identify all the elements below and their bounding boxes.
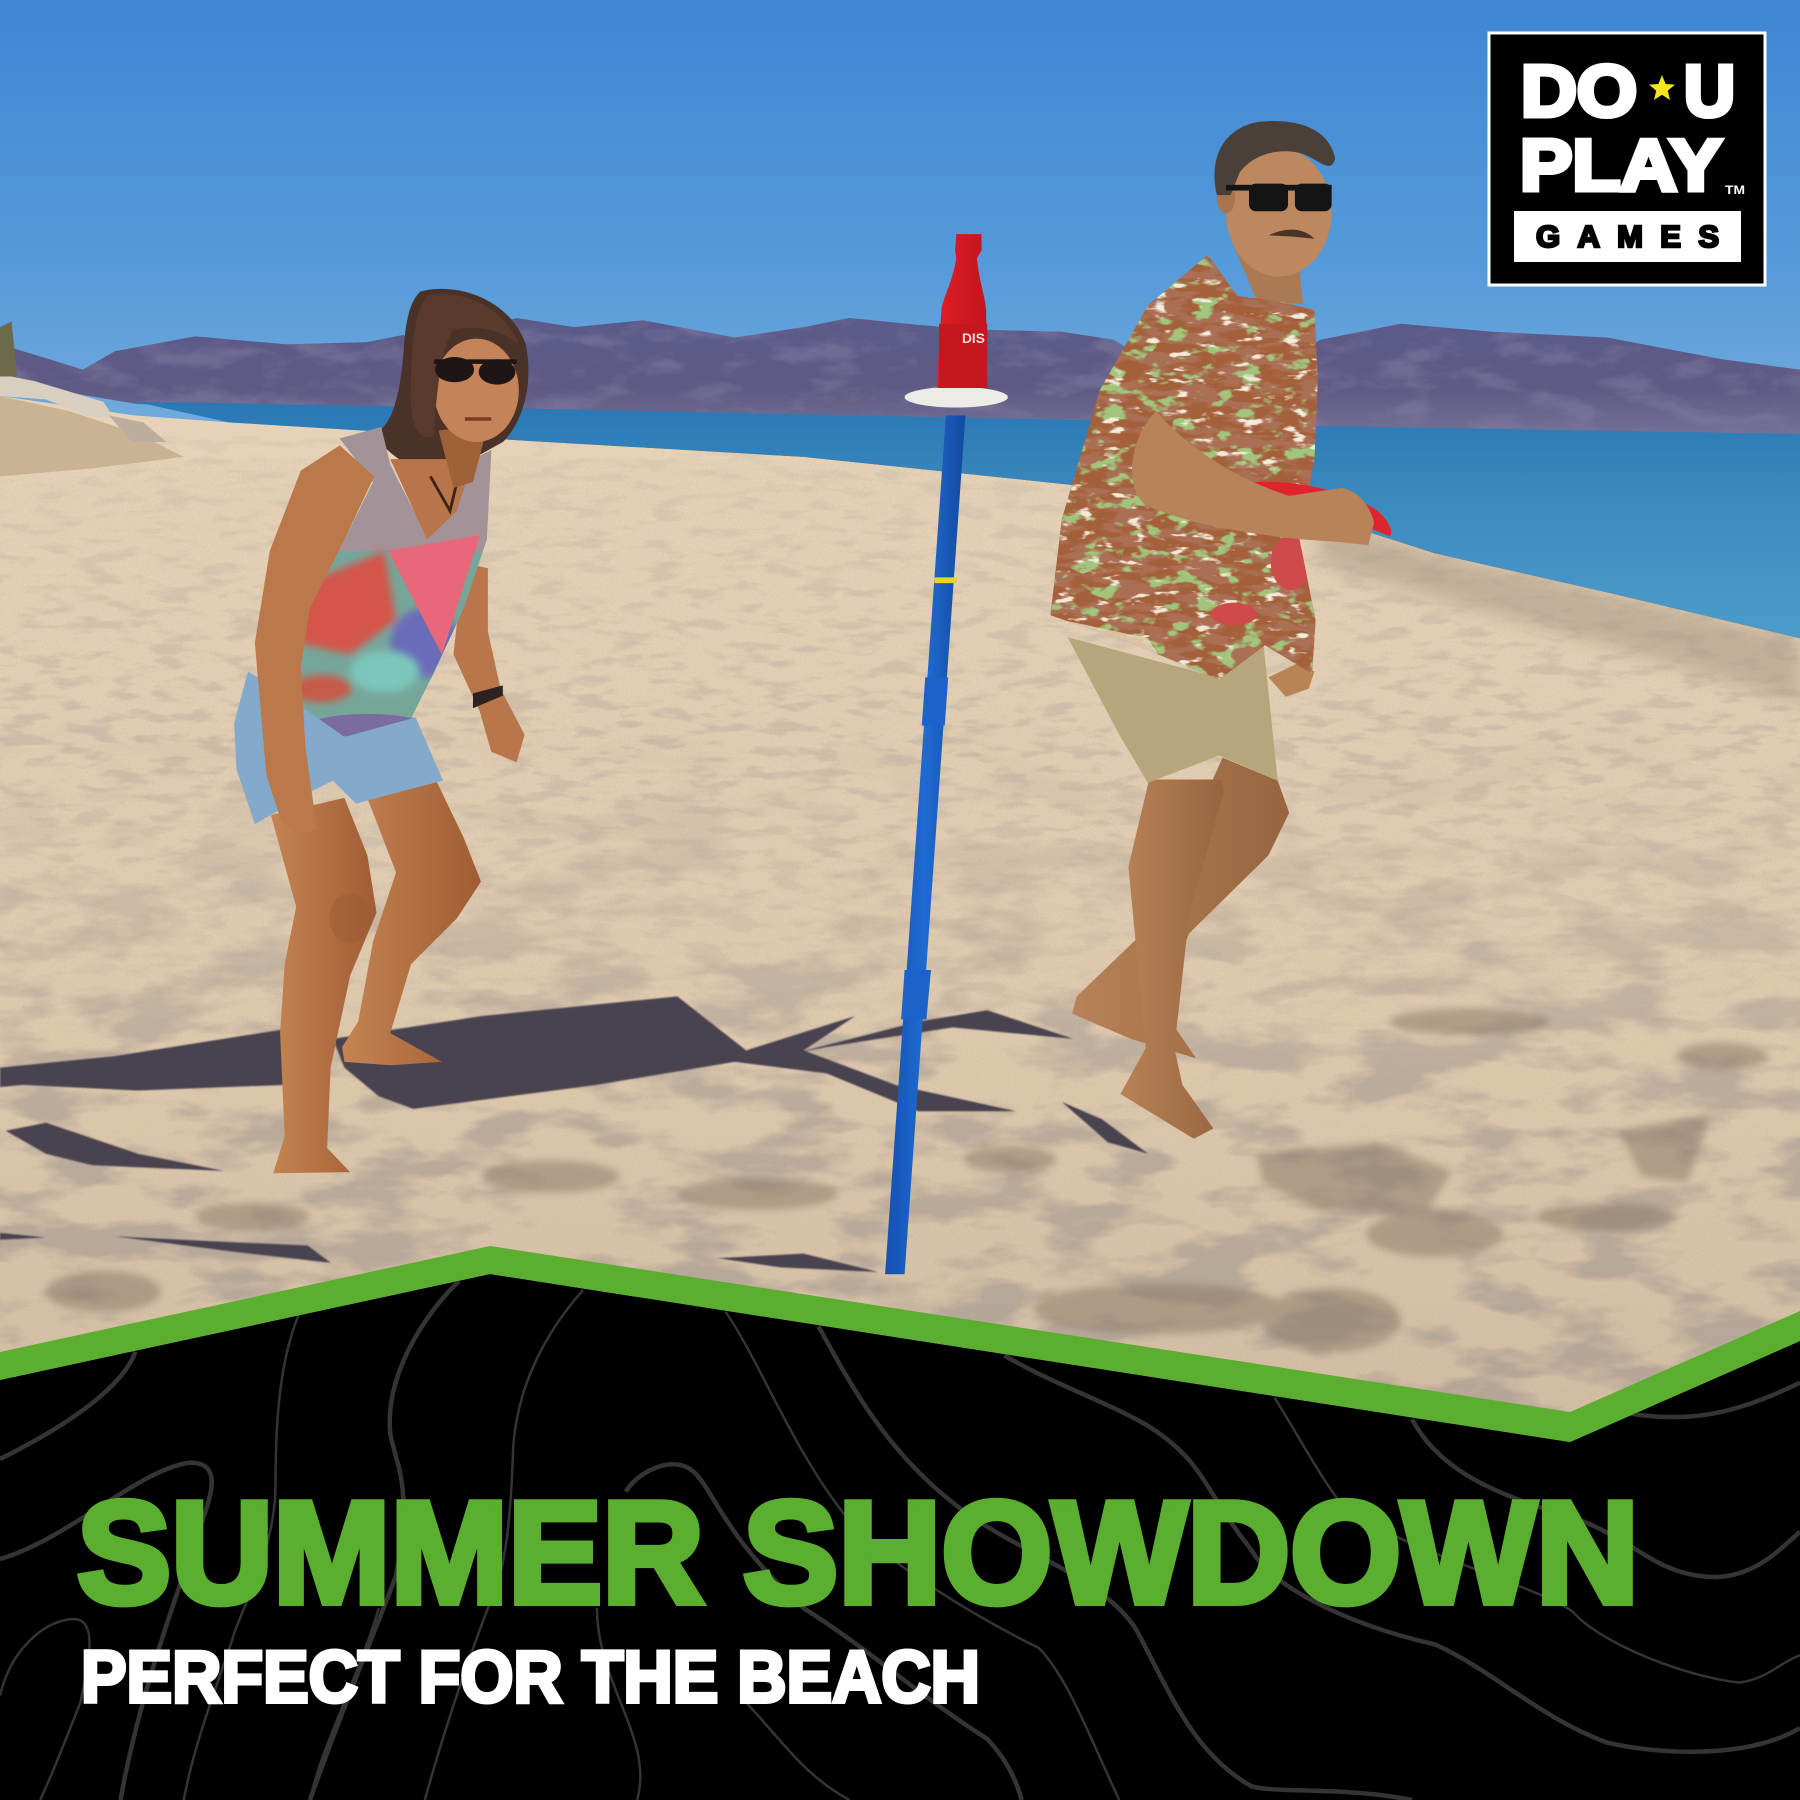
- heading: [77, 1472, 1639, 1634]
- ear: [1217, 181, 1235, 214]
- game pole with bottle: [885, 234, 1008, 1274]
- bottle label text: DIS: [962, 331, 985, 346]
- bracelet: [473, 685, 503, 708]
- back hair: [373, 289, 528, 472]
- sea: [135, 402, 1800, 638]
- footer panel: black band: [0, 1274, 1800, 1800]
- denim shorts: [234, 672, 443, 824]
- lower hand: [1268, 664, 1314, 697]
- trademark: TM: [1725, 183, 1745, 197]
- logo word U: U: [1684, 52, 1735, 132]
- heading: SHOWDOWN: [743, 1472, 1639, 1634]
- neck: [439, 425, 488, 488]
- red bottle: [937, 234, 987, 388]
- cast shadows on the sand: [0, 996, 1148, 1272]
- pole collars: [901, 677, 948, 1019]
- topographic contour lines: [0, 1281, 1800, 1800]
- sand: near dune texture: [0, 790, 1800, 1410]
- moustache: [1268, 230, 1314, 239]
- yellow band: [934, 577, 957, 583]
- sand grain: [0, 459, 1800, 1446]
- face: [434, 339, 519, 442]
- logo word PLAY: PLAY: [1520, 126, 1722, 206]
- bottle label band: [939, 324, 987, 388]
- face: [1226, 148, 1332, 277]
- distant mountains: [12, 318, 1800, 434]
- sky: [0, 0, 1800, 436]
- sand: wet shoreline strip: [1320, 517, 1800, 703]
- man player: [1039, 121, 1391, 1139]
- knee shading: [329, 893, 371, 944]
- sand: dune shadow patches: [46, 1008, 1768, 1352]
- sand: [0, 396, 1800, 1800]
- logo background: [1489, 33, 1765, 285]
- logo: Do U Play Games: [1489, 33, 1765, 285]
- blue telescopic pole: [885, 416, 965, 1274]
- icon: yellow star: [1649, 75, 1675, 100]
- left leg: [271, 798, 377, 1173]
- sunglasses: [1226, 184, 1332, 211]
- heading: SUMMER: [77, 1472, 704, 1634]
- throwing arm: [1132, 411, 1374, 545]
- logo word DO: DO: [1521, 52, 1637, 132]
- khaki shorts: [1068, 637, 1278, 783]
- rocks on the left shore: [0, 321, 184, 476]
- front leg: [1120, 779, 1224, 1139]
- hawaiian shirt: [1050, 255, 1318, 680]
- right leg: [342, 781, 481, 1065]
- mouth: [465, 418, 491, 421]
- neck: [1234, 247, 1303, 304]
- right arm: [453, 563, 525, 762]
- white disc plate: [905, 387, 1008, 408]
- front hair: [411, 294, 519, 437]
- chest skin: [390, 459, 473, 540]
- back leg: [1072, 758, 1289, 1058]
- hair: [1214, 121, 1335, 195]
- red flying disc: [1252, 482, 1391, 536]
- sand: distant footprints texture: [0, 436, 1800, 1033]
- necklace: [430, 473, 459, 511]
- sunglasses: [434, 357, 517, 385]
- woman player: [234, 289, 528, 1173]
- patterned tank top: [300, 427, 492, 737]
- logo word GAMES: GAMES: [1536, 219, 1719, 254]
- left arm: [255, 445, 374, 836]
- games box: [1514, 211, 1741, 262]
- green zigzag band: [0, 1246, 1800, 1442]
- subheading: PERFECT FOR THE BEACH: [81, 1637, 980, 1718]
